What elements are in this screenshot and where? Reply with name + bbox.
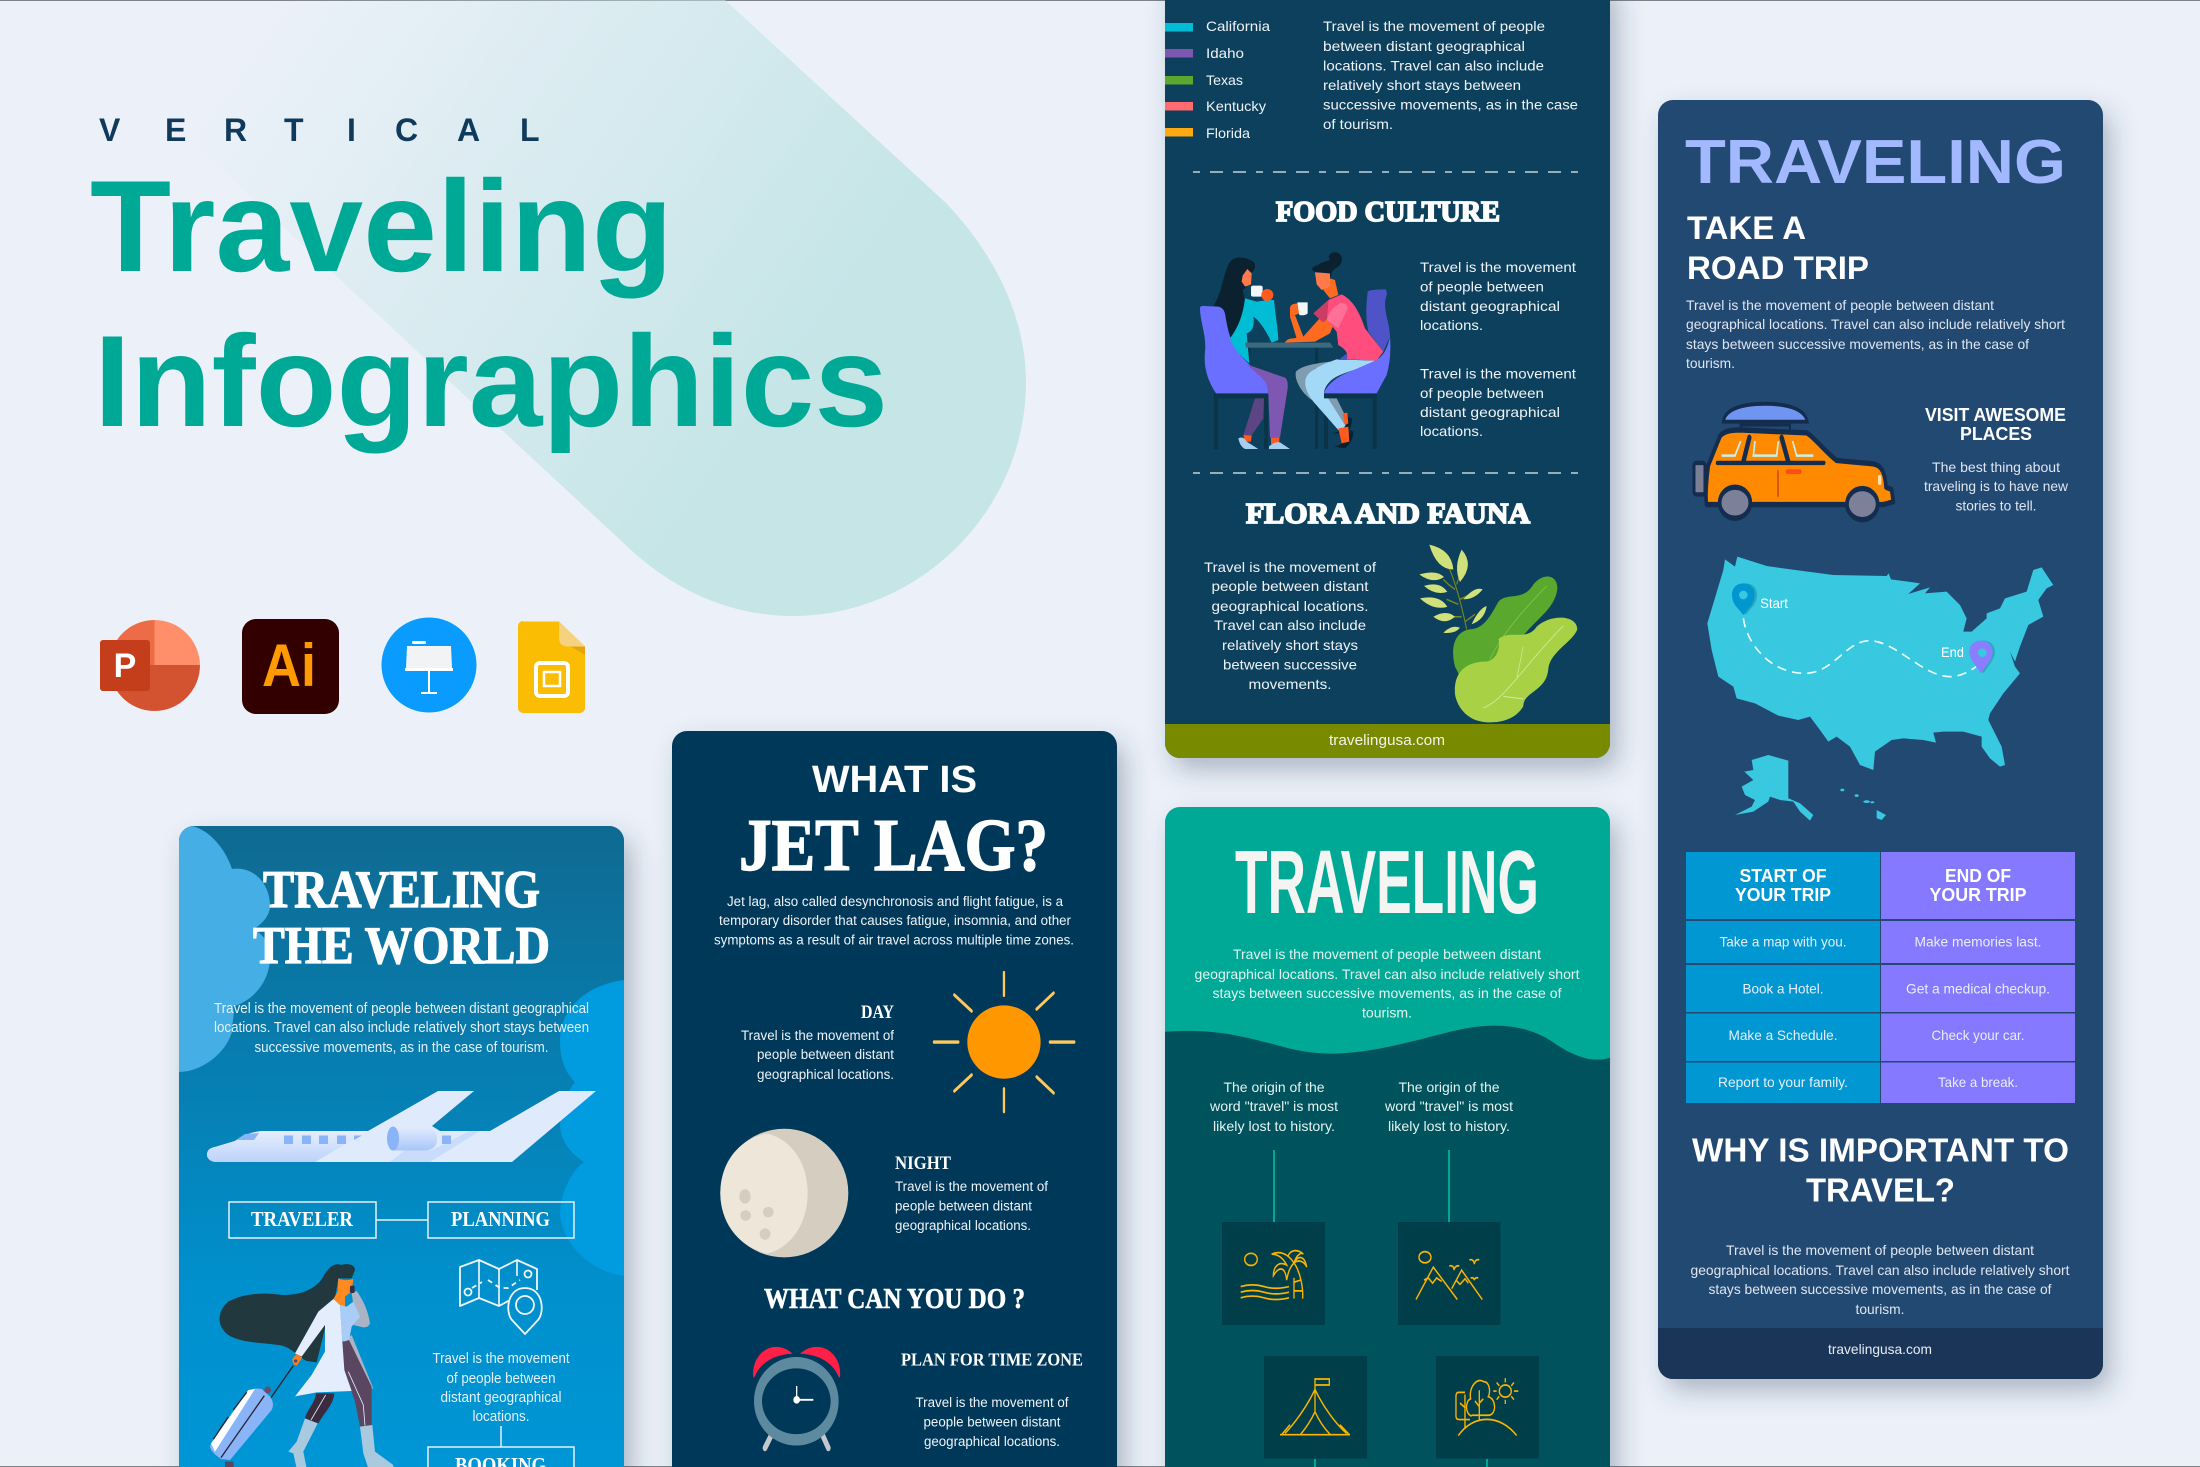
legend paragraph (1323, 18, 1578, 132)
title: TRAVELING (263, 861, 540, 919)
table: trip checklist: YOUR TRIP (1930, 885, 2026, 905)
intro text: tourism. (1362, 1004, 1412, 1020)
intro text: Travel is the movement of people between distant (1233, 946, 1541, 962)
food culture text: distant geographical (1420, 298, 1560, 314)
heading: infographics: Infographics (94, 308, 888, 454)
food culture text (1420, 259, 1576, 439)
legend: Idaho (1206, 45, 1244, 61)
map: united states route: End (1941, 644, 1964, 660)
legend paragraph: relatively short stays between (1323, 77, 1521, 93)
food culture text: distant geographical (1420, 404, 1560, 420)
road trip text: stays between successive movements, as in the case of (1686, 336, 2029, 352)
heading: traveling: TRAVELING (1685, 128, 2066, 197)
visit awesome places: The best thing about (1932, 459, 2060, 475)
illustration: orange car (1694, 404, 1893, 520)
traveler woman illustration (210, 1264, 393, 1467)
footer: travelingusa.com (1165, 724, 1610, 758)
intro text: stays between successive movements, as in the case of (1212, 985, 1562, 1001)
legend (1165, 18, 1270, 141)
table: trip checklist (1686, 852, 2075, 1103)
legend paragraph: locations. Travel can also include (1323, 58, 1544, 74)
cloud left (179, 826, 270, 1072)
footer: travelingusa.com: travelingusa.com (1828, 1341, 1932, 1357)
icon: illustrator (242, 619, 339, 714)
legend paragraph: successive movements, as in the case (1323, 96, 1578, 112)
box: traveler: TRAVELER (251, 1207, 354, 1231)
illustration: two women at cafe (1200, 252, 1390, 449)
airplane (207, 1091, 596, 1162)
origin text right: The origin of the (1398, 1079, 1500, 1095)
heading: jet lag: JET LAG? (739, 805, 1048, 887)
night text: people between distant (895, 1198, 1032, 1214)
table: trip checklist: YOUR TRIP (1735, 885, 1831, 905)
road trip text: geographical locations. Travel can also include relatively short (1686, 316, 2065, 332)
night text (895, 1153, 1048, 1233)
footer: travelingusa.com: travelingusa.com (1329, 732, 1445, 749)
planning text (432, 1351, 570, 1425)
origin text right: word "travel" is most (1384, 1098, 1513, 1114)
heading: why is important to travel: WHY IS IMPORTANT TO (1692, 1132, 2069, 1168)
why travel text: Travel is the movement of people between distant (1726, 1242, 2034, 1258)
food culture text: Travel is the movement (1420, 259, 1576, 275)
planning text: of people between (446, 1371, 556, 1387)
icon: alarm clock (753, 1347, 840, 1448)
food culture text: of people between (1420, 385, 1544, 401)
heading: food culture: FOOD CULTURE (1276, 197, 1500, 228)
table: trip checklist: Report to your family. (1718, 1074, 1848, 1090)
night text: Travel is the movement of (895, 1179, 1048, 1194)
box: booking (428, 1447, 574, 1467)
table: trip checklist: Make a Schedule. (1728, 1027, 1838, 1043)
map: united states route: Start (1760, 595, 1788, 611)
intro text (214, 1001, 589, 1056)
eyebrow: vertical: VERTICAL (99, 112, 540, 148)
heading: why is important to travel (1692, 1132, 2069, 1208)
visit awesome places: stories to tell. (1956, 498, 2036, 514)
icon: powerpoint: P (114, 647, 136, 685)
icon: sun (934, 972, 1074, 1112)
table: trip checklist: Check your car. (1932, 1027, 2024, 1043)
table: trip checklist: Make memories last. (1914, 934, 2042, 950)
flora text (1204, 559, 1376, 692)
plan for time zone text (901, 1350, 1083, 1449)
day text: DAY (861, 1002, 894, 1023)
flora text: Travel is the movement of (1204, 559, 1376, 575)
legend paragraph: of tourism. (1323, 116, 1393, 132)
icon: powerpoint (100, 620, 200, 711)
icon: google slides (518, 621, 585, 713)
night text: geographical locations. (895, 1218, 1031, 1233)
footer: travelingusa.com (1658, 1328, 2103, 1379)
panel: jet lag (672, 731, 1117, 1467)
legend paragraph: Travel is the movement of people (1323, 18, 1545, 34)
visit awesome places: PLACES (1960, 424, 2032, 444)
title (253, 871, 548, 965)
icon: illustrator: Ai (262, 632, 316, 699)
title block (90, 112, 888, 454)
day text (741, 1002, 894, 1082)
illustration: plants (1419, 545, 1577, 722)
road trip text: tourism. (1686, 355, 1735, 371)
plan for time zone text: PLAN FOR TIME ZONE (901, 1350, 1083, 1370)
planning text: Travel is the movement (432, 1351, 570, 1367)
why travel text (1690, 1242, 2070, 1317)
food culture text: Travel is the movement (1420, 366, 1576, 382)
food culture text: of people between (1420, 278, 1544, 294)
title: THE WORLD (253, 917, 550, 975)
food culture text: locations. (1420, 317, 1483, 333)
panel: traveling the world (179, 826, 624, 1467)
origin text left: likely lost to history. (1213, 1118, 1335, 1134)
heading: take a road trip: TAKE A (1687, 210, 1806, 246)
jet lag intro: temporary disorder that causes fatigue, insomnia, and other (719, 913, 1071, 928)
origin text left: word "travel" is most (1209, 1098, 1338, 1114)
heading: take a road trip (1687, 210, 1869, 286)
box: planning (428, 1202, 574, 1238)
plan for time zone text: Travel is the movement of (916, 1395, 1069, 1410)
intro text: successive movements, as in the case of tourism. (254, 1040, 548, 1056)
origin text left: The origin of the (1224, 1079, 1325, 1095)
table: trip checklist: Take a break. (1938, 1074, 2018, 1090)
why travel text: geographical locations. Travel can also include relatively short (1690, 1262, 2070, 1278)
visit awesome places: VISIT AWESOME (1925, 405, 2066, 425)
cloud right (560, 980, 624, 1276)
flora text: between successive (1223, 656, 1357, 672)
plan for time zone text: people between distant (924, 1414, 1061, 1430)
legend: Texas (1206, 72, 1243, 88)
heading: traveling: Traveling (90, 153, 673, 299)
visit awesome places: traveling is to have new (1924, 478, 2069, 494)
origin text right: likely lost to history. (1388, 1118, 1510, 1134)
legend: Florida (1206, 125, 1250, 141)
heading: flora and fauna: FLORA AND FAUNA (1246, 499, 1531, 530)
table: trip checklist: END OF (1945, 866, 2011, 886)
why travel text: stays between successive movements, as in the case of (1708, 1281, 2052, 1297)
heading: what is: WHAT IS (812, 759, 977, 801)
flora text: movements. (1248, 676, 1332, 692)
intro text: geographical locations. Travel can also include relatively short (1194, 966, 1580, 982)
panel: food culture and flora (1165, 0, 1610, 758)
origin text left (1209, 1079, 1338, 1134)
flora text: geographical locations. (1212, 598, 1368, 614)
icon: mountains (1416, 1252, 1482, 1300)
night text: NIGHT (895, 1153, 951, 1174)
heading: what can you do: WHAT CAN YOU DO ? (764, 1284, 1025, 1315)
box: traveler (229, 1202, 376, 1238)
flora text: Travel can also include (1214, 617, 1366, 633)
table: trip checklist: START OF (1740, 866, 1827, 886)
panel: traveling teal (1165, 807, 1610, 1467)
box: planning: PLANNING (451, 1207, 550, 1231)
intro text: Travel is the movement of people between distant geographical (214, 1001, 589, 1017)
icon: keynote (382, 618, 476, 712)
heading: why is important to travel: TRAVEL? (1806, 1172, 1955, 1208)
table: trip checklist: Take a map with you. (1720, 934, 1846, 950)
panel: take a road trip (1658, 100, 2103, 1379)
background blob (39, 0, 1026, 616)
planning text: locations. (472, 1409, 530, 1425)
day text: people between distant (757, 1047, 894, 1062)
jet lag intro (714, 894, 1074, 948)
heading: take a road trip: ROAD TRIP (1687, 250, 1869, 286)
jet lag intro: Jet lag, also called desynchronosis and flight fatigue, is a (727, 894, 1063, 909)
legend paragraph: between distant geographical (1323, 38, 1525, 54)
wave section (1165, 1026, 1610, 1467)
road trip text: Travel is the movement of people between distant (1686, 297, 1994, 313)
legend: California (1206, 18, 1270, 34)
table: trip checklist: Get a medical checkup. (1906, 980, 2050, 996)
origin text right (1384, 1079, 1513, 1134)
table: trip checklist: Book a Hotel. (1742, 980, 1824, 996)
icon: moon (720, 1129, 848, 1257)
jet lag intro: symptoms as a result of air travel across multiple time zones. (714, 932, 1074, 948)
icon: tent (1280, 1378, 1350, 1435)
icon: map with pin (460, 1260, 542, 1334)
icon: palm beach (1241, 1251, 1307, 1300)
day text: Travel is the movement of (741, 1028, 894, 1043)
icon: trees and sun (1456, 1378, 1518, 1436)
planning text: distant geographical (440, 1390, 562, 1406)
why travel text: tourism. (1856, 1301, 1904, 1317)
day text: geographical locations. (757, 1067, 894, 1082)
food culture text: locations. (1420, 423, 1483, 439)
flora text: people between distant (1212, 578, 1369, 594)
flora text: relatively short stays (1222, 637, 1358, 653)
plan for time zone text: geographical locations. (924, 1434, 1060, 1449)
heading: traveling: TRAVELING (1235, 833, 1539, 933)
intro text (1194, 946, 1580, 1020)
legend: Kentucky (1206, 98, 1266, 114)
road trip text (1686, 297, 2065, 371)
visit awesome places (1924, 405, 2069, 514)
intro text: locations. Travel can also include relatively short stays between (214, 1020, 589, 1036)
map: united states route (1707, 557, 2053, 821)
software icons (100, 618, 585, 714)
